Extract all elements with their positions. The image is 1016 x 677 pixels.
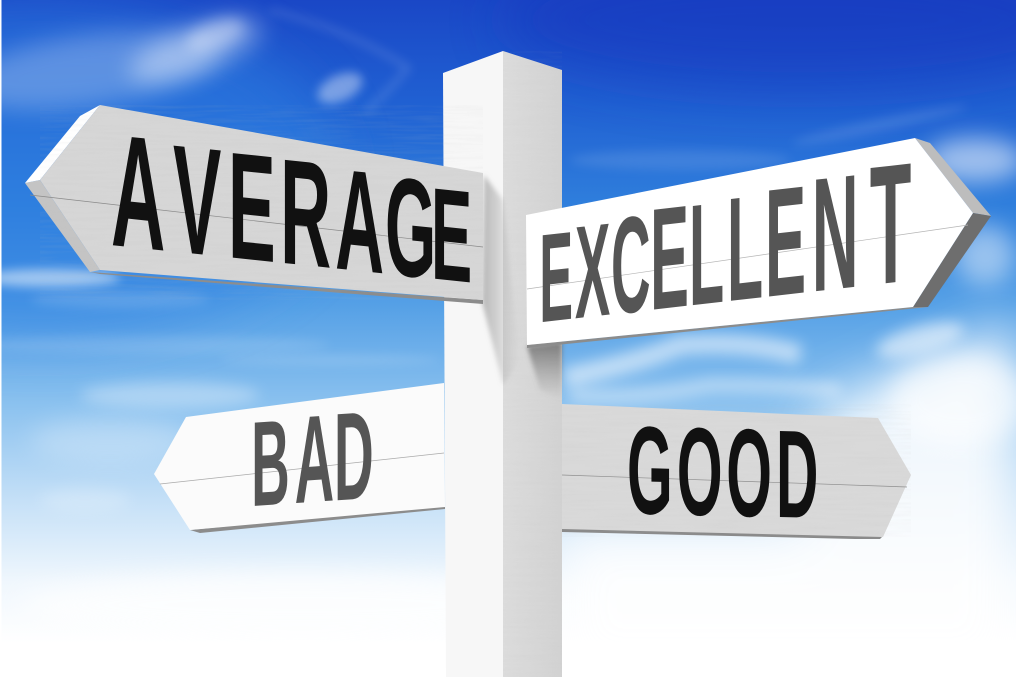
sign: bad: [154, 383, 445, 533]
white left edge: [0, 0, 2, 677]
label: BAD: B: [251, 394, 290, 532]
label: EXCELLENT: L: [689, 173, 724, 337]
label: BAD: A: [295, 389, 334, 530]
post left face: [443, 51, 503, 677]
sign: good: [562, 400, 911, 545]
label: GOOD: O: [677, 402, 723, 542]
label: EXCELLENT: E: [539, 206, 573, 350]
signpost: [443, 51, 562, 677]
label: EXCELLENT: E: [650, 176, 689, 341]
label: AVERAGE: E: [228, 120, 276, 295]
label: AVERAGE: G: [385, 148, 436, 310]
label: EXCELLENT: L: [727, 163, 763, 333]
lower right cloud bank: [560, 320, 1016, 677]
label: EXCELLENT: E: [765, 153, 806, 330]
label: EXCELLENT: C: [611, 187, 651, 344]
label: GOOD: O: [726, 403, 772, 544]
label: AVERAGE: R: [280, 127, 331, 300]
post right face: [503, 51, 562, 677]
label: AVERAGE: A: [111, 101, 165, 285]
sign: excellent: [526, 128, 991, 359]
label: GOOD: G: [627, 400, 673, 541]
label: EXCELLENT: X: [575, 196, 610, 347]
label: EXCELLENT: N: [812, 141, 859, 327]
sign: average: [25, 101, 483, 317]
label: AVERAGE: V: [173, 112, 221, 290]
post shadow from average sign: [482, 175, 520, 385]
label: AVERAGE: E: [431, 159, 472, 311]
post shadow from excellent sign: [527, 342, 562, 400]
lower left cloud bank: [20, 573, 580, 637]
label: EXCELLENT: T: [870, 128, 911, 322]
label: AVERAGE: A: [335, 138, 384, 304]
label: GOOD: D: [776, 404, 818, 545]
label: BAD: D: [334, 386, 374, 528]
